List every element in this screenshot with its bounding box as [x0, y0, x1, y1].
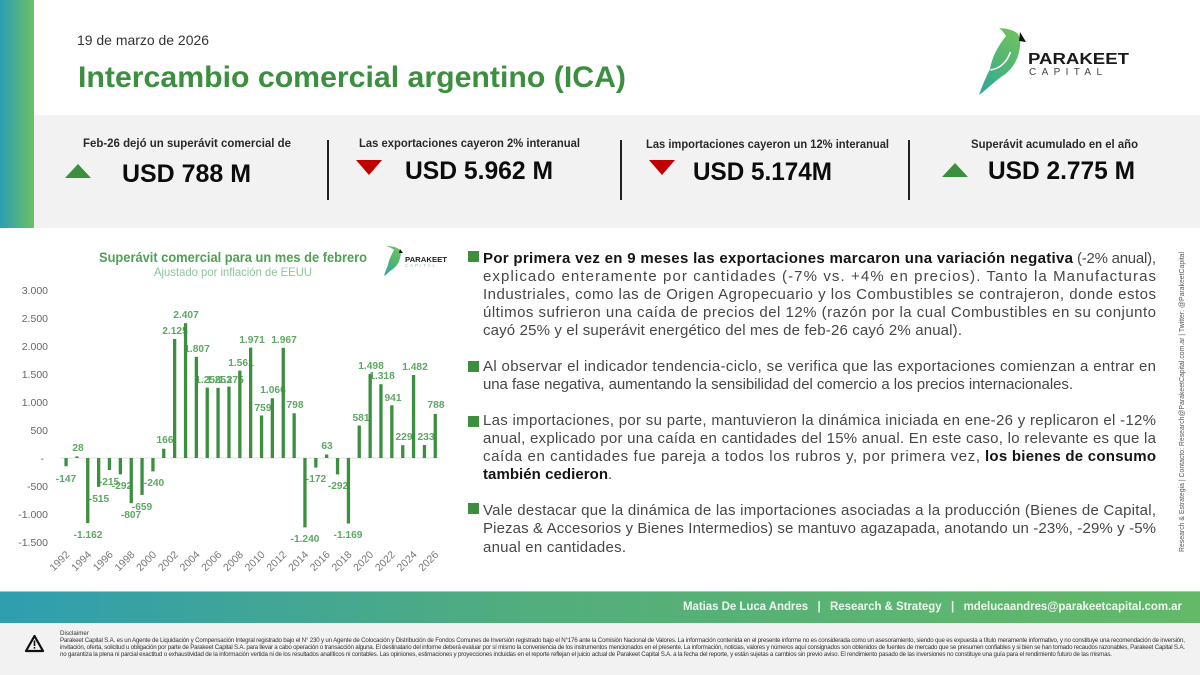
y axis labels: 2.500	[22, 313, 48, 325]
text block: imports: Las importaciones, por su parte, mantuvieron la dinámica iniciada en ene-26 y replicaron el -12%	[483, 412, 1156, 429]
x axis year labels: 1994	[69, 549, 94, 574]
value labels: -659	[132, 502, 153, 513]
value labels: 1.967	[271, 335, 297, 346]
disclaimer text: no garantiza la plena ni parcial exactitud o exhaustividad de la información vertida ni de los resultados analíticos ni contables. Las opiniones, estimaciones y proyecciones incluidas en el reporte reflejan el juicio actual de Parakeet Capital S.A. a la fecha del reporte, y están sujetas a cambios sin previo aviso. El rendimiento pasado de las inversiones no constituye una guía para el rendimiento futuro de las mismas.	[60, 651, 1112, 658]
chart logo: CAPITAL	[405, 263, 435, 268]
report date: 19 de marzo de 2026	[77, 32, 209, 48]
x axis year labels	[47, 549, 441, 574]
KPI: exports: USD 5.962 M	[405, 157, 553, 185]
y axis labels: -1.500	[18, 537, 48, 549]
value labels: 166	[156, 435, 174, 446]
value labels: 63	[321, 441, 333, 452]
x axis year labels: 2016	[308, 549, 333, 574]
x axis year labels: 2024	[395, 549, 420, 574]
value labels: -215	[99, 477, 120, 488]
chart subtitle: Ajustado por inflación de EEUU	[154, 265, 312, 279]
text block: production imports: anual en cantidades.	[483, 539, 626, 556]
chart: February trade surplus	[18, 246, 448, 574]
text block: exports: (-2% anual),	[1077, 250, 1156, 267]
chart logo	[384, 246, 448, 276]
value labels	[56, 310, 445, 545]
disclaimer text: Parakeet Capital S.A. es un Agente de Liquidación y Compensación Integral registrado bajo el N° 230 y un Agente de Colocación y Distribución de Fondos Comunes de Inversión registrado bajo el N°176 ante la Comisión Nacional de Valores. La información contenida en el presente informe no es considerada como un asesoramiento, siendo que es expuesta a título meramente informativo, y no constituye una recomendación de inversión,	[60, 637, 1185, 644]
y axis labels: -1.000	[18, 509, 48, 521]
value labels: -292	[328, 481, 349, 492]
value labels: 798	[286, 400, 304, 411]
side gradient bar	[0, 0, 34, 228]
disclaimer text: Disclaimer	[60, 630, 89, 637]
value labels: -172	[306, 474, 327, 485]
value labels: 1.561	[228, 358, 254, 369]
KPI: accumulated surplus: USD 2.775 M	[988, 157, 1135, 185]
text block: imports	[468, 412, 1157, 483]
y axis labels: 1.500	[22, 369, 48, 381]
chart title: Superávit comercial para un mes de febrero	[99, 250, 367, 265]
KPI: imports: Las importaciones cayeron un 12% interanual	[646, 137, 889, 151]
y axis labels: 3.000	[22, 285, 48, 297]
x axis year labels: 1998	[112, 549, 138, 574]
chart logo: PARAKEET	[405, 257, 448, 264]
text block: exports: Industriales, como las de Origen Agropecuario y los Combustibles se contrajeron, donde estos	[483, 286, 1156, 303]
value labels: 581	[352, 413, 370, 424]
x axis year labels: 2020	[351, 549, 376, 574]
text block: imports: anual, explicado por una caída en cantidades del 15% anual. En este caso, lo relevante es que la	[483, 430, 1157, 447]
logo: Parakeet Capital	[979, 28, 1129, 95]
x axis year labels: 2002	[156, 549, 181, 574]
x axis year labels: 2014	[286, 549, 311, 574]
bars	[64, 323, 437, 527]
x axis year labels: 2012	[264, 549, 289, 574]
text block: production imports	[468, 502, 1156, 556]
disclaimer panel	[0, 623, 1200, 675]
text block: production imports: Vale destacar que la dinámica de las importaciones asociadas a la producción (Bienes de Capital,	[483, 502, 1156, 519]
KPI: imports: USD 5.174M	[693, 158, 832, 186]
text block: trend-cycle	[468, 358, 1156, 393]
disclaimer text: invitación, oferta, solicitud u obligación por parte de Parakeet Capital S.A. para llevar a cabo operación o transacción alguna. El destinatario del informe deberá evaluar por sí mismo la conveniencia de los instrumentos mencionados en el presente. La información, noticias, valores y números aquí consignados son obtenidos de fuentes de mercado que se presumen confiables y si bien se han tomado recaudos razonables, Parakeet Capital S.A.	[60, 644, 1185, 651]
title: Intercambio comercial argentino (ICA)	[78, 61, 626, 94]
logo: Parakeet Capital: PARAKEET	[1028, 51, 1129, 68]
text block: trend-cycle: una fase negativa, aumentando la sensibilidad del comercio a los precios internacionales.	[483, 376, 1073, 393]
text block: exports: últimos sufrieron una caída de precios del 12% (razón por la cual Combustibles en su conjunto	[483, 304, 1156, 321]
KPI: accumulated surplus	[942, 137, 1138, 185]
value labels: 1.258	[195, 375, 221, 386]
text block: imports: los bienes de consumo	[985, 448, 1156, 465]
x axis year labels: 2018	[329, 549, 355, 574]
x axis year labels: 1992	[47, 549, 72, 574]
text block: exports: cayó 25% y el superávit energético del mes de feb-26 cayó 2% anual).	[483, 322, 962, 339]
value labels: 28	[72, 443, 84, 454]
x axis year labels: 2008	[221, 549, 246, 574]
panel: key figures	[34, 115, 1200, 228]
text block: exports: explicado enteramente por cantidades (-7% vs. +4% en precios). Tanto la Manufacturas	[483, 268, 1156, 285]
text block: imports: también cedieron	[483, 466, 608, 483]
x axis year labels: 2006	[199, 549, 224, 574]
y axis labels: -500	[27, 481, 48, 493]
y axis labels: 2.000	[22, 341, 48, 353]
value labels: -292	[112, 481, 133, 492]
text block: imports: .	[608, 466, 612, 483]
value labels: 2.125	[162, 326, 188, 337]
text block: exports	[468, 250, 1156, 339]
KPI: accumulated surplus: Superávit acumulado en el año	[971, 137, 1138, 151]
icon: warning	[26, 636, 43, 651]
value labels: 1.482	[402, 362, 428, 373]
author contact: Matias De Luca Andres | Research & Strategy | mdelucaandres@parakeetcapital.com.ar	[683, 601, 1183, 613]
value labels: -240	[144, 478, 165, 489]
value labels: 2.407	[173, 310, 199, 321]
x axis year labels: 2004	[178, 549, 203, 574]
value labels: -1.240	[291, 534, 320, 545]
vertical contact text: Research & Estrategia | Contacto: Research@ParakeetCapital.com.ar | Twitter: @ParakeetCapital	[1177, 252, 1186, 552]
value labels: -807	[121, 510, 142, 521]
KPI: trade surplus: USD 788 M	[122, 160, 251, 188]
value labels: 759	[254, 403, 272, 414]
text block: exports: Por primera vez en 9 meses las exportaciones marcaron una variación negativa	[483, 250, 1074, 267]
value labels: 233	[418, 432, 435, 443]
value labels: -147	[56, 474, 77, 485]
value labels: 941	[384, 393, 402, 404]
value labels: -1.169	[334, 530, 363, 541]
disclaimer text	[60, 630, 1185, 658]
text block: production imports: Piezas & Accesorios y Bienes Intermedios) se mantuvo agazapada, anotando un -23%, -29% y -5%	[483, 520, 1156, 537]
y axis labels	[18, 285, 48, 549]
value labels: 788	[428, 400, 445, 411]
x axis year labels: 2000	[134, 549, 159, 574]
value labels: 1.066	[260, 385, 286, 396]
text block: trend-cycle: Al observar el indicador tendencia-ciclo, se verifica que las exportaciones comienzan a entrar en	[483, 358, 1156, 375]
y axis labels: 500	[30, 425, 48, 437]
KPI: trade surplus: Feb-26 dejó un superávit comercial de	[83, 136, 291, 150]
value labels: 1.318	[369, 371, 395, 382]
value labels: 229	[396, 432, 413, 443]
x axis year labels: 2010	[243, 549, 268, 574]
value labels: -1.162	[74, 530, 103, 541]
x axis year labels: 2026	[416, 549, 441, 574]
text block: imports: caída en cantidades fue pareja a todos los rubros y, por primera vez,	[483, 448, 980, 465]
footer band	[0, 591, 1200, 623]
y axis labels: -	[40, 453, 44, 465]
KPI: imports	[646, 137, 889, 186]
value labels: -515	[89, 494, 110, 505]
KPI: exports: Las exportaciones cayeron 2% interanual	[359, 136, 580, 150]
logo: Parakeet Capital: CAPITAL	[1029, 67, 1102, 78]
x axis year labels: 1996	[91, 549, 116, 574]
value labels: 1.253	[206, 375, 232, 386]
KPI: exports	[356, 136, 580, 185]
value labels: 1.275	[218, 375, 244, 386]
x axis year labels: 2022	[373, 549, 398, 574]
value labels: 1.807	[184, 344, 210, 355]
value labels: 1.971	[239, 335, 265, 346]
value labels: 1.498	[358, 361, 384, 372]
y axis labels: 1.000	[22, 397, 48, 409]
KPI: trade surplus	[65, 136, 291, 188]
